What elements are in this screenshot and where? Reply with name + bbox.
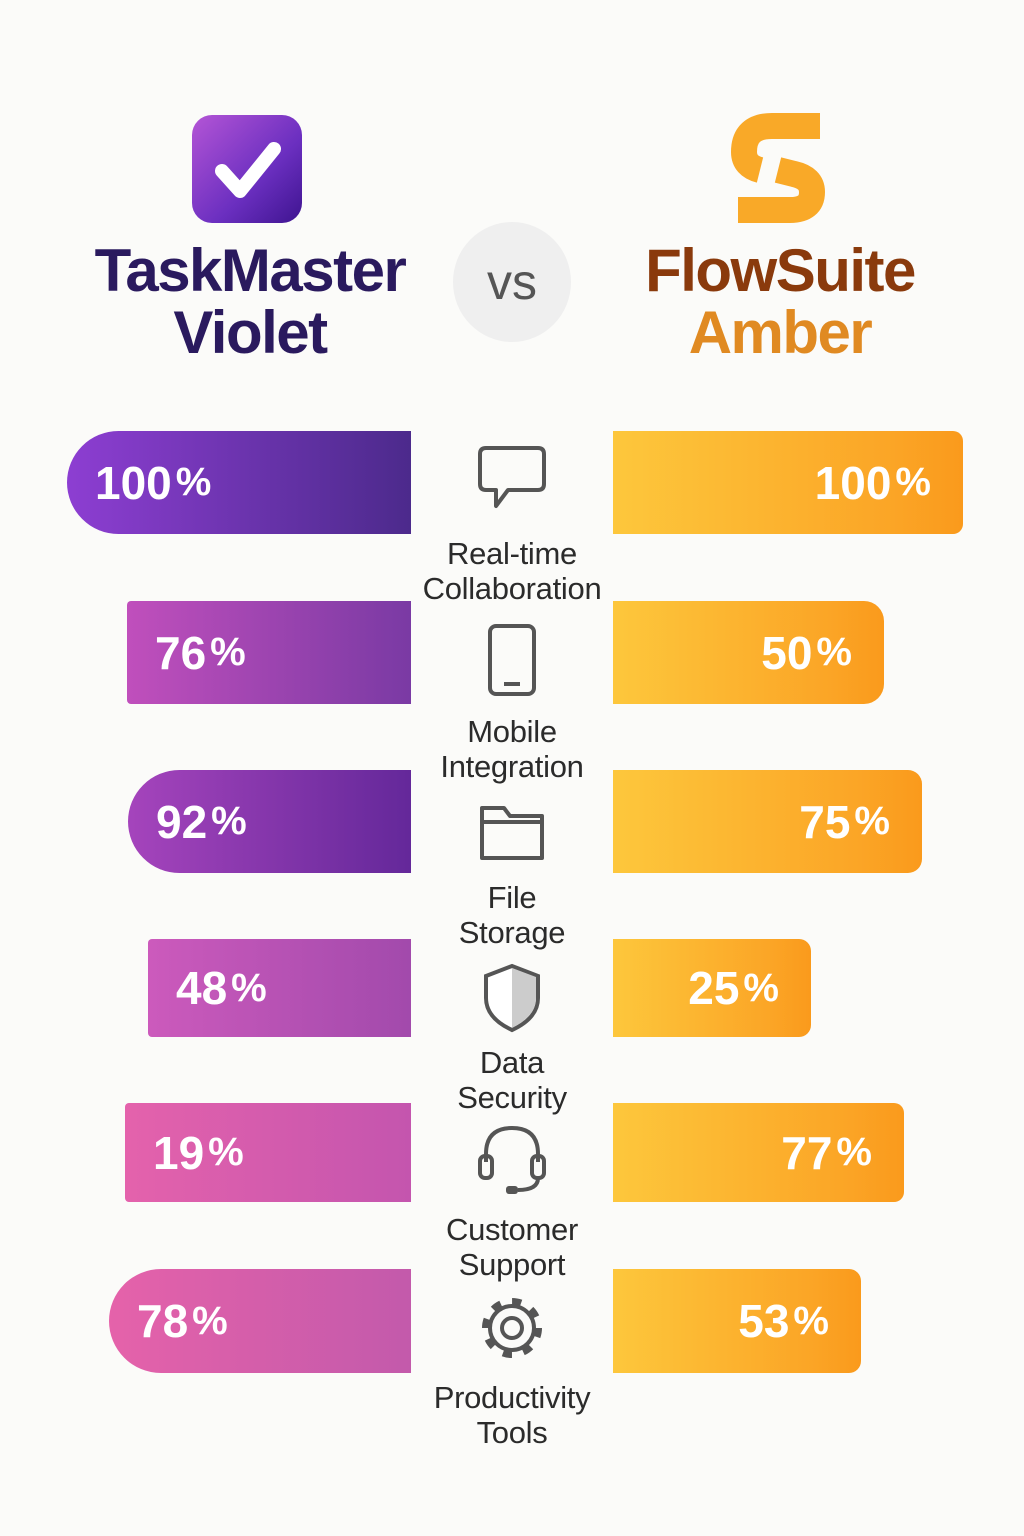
- label: Mobile Integration: Integration: [440, 749, 584, 784]
- bar: FlowSuite File 75%: %: [854, 799, 890, 843]
- logo: FlowSuite: [731, 113, 825, 223]
- label: Productivity Tools: [434, 1380, 590, 1450]
- bar: FlowSuite Security 25%: %: [743, 966, 779, 1010]
- vs badge: vs: [487, 254, 537, 310]
- label: File Storage: File: [488, 880, 536, 915]
- bar: TaskMaster File 92%: %: [211, 799, 247, 843]
- label: Customer Support: Support: [459, 1247, 565, 1282]
- bar: FlowSuite Real-time 100%: 100: [815, 456, 891, 508]
- bar: FlowSuite Real-time 100%: [613, 431, 963, 534]
- bar: TaskMaster Support 19%: %: [208, 1130, 244, 1174]
- label: Data Security: [457, 1045, 567, 1115]
- title: FlowSuite Amber: Amber: [689, 299, 871, 366]
- label: File Storage: Storage: [459, 915, 565, 950]
- bar: TaskMaster Real-time 100%: 100: [95, 456, 172, 508]
- bar: FlowSuite Support 77%: %: [836, 1130, 872, 1174]
- bar: FlowSuite Mobile 50%: %: [816, 630, 852, 674]
- right bars: [484, 431, 963, 1373]
- title: TaskMaster Violet: Violet: [173, 299, 327, 366]
- bar: FlowSuite Real-time 100%: %: [895, 460, 931, 504]
- bar: FlowSuite Support 77%: [613, 1103, 904, 1202]
- bar: FlowSuite File 75%: 75: [799, 796, 850, 848]
- bar: FlowSuite Mobile 50%: [613, 601, 884, 704]
- icon: gear: [482, 1298, 542, 1358]
- label: Mobile Integration: [440, 714, 584, 784]
- icon: phone: [488, 624, 536, 696]
- bar: TaskMaster Security 48%: [148, 939, 411, 1037]
- label: Real-time Collaboration: Collaboration: [423, 571, 601, 606]
- bar: TaskMaster Real-time 100%: %: [176, 460, 211, 504]
- label: Real-time Collaboration: [423, 536, 601, 606]
- icon: folder: [480, 806, 544, 860]
- label: Data Security: Data: [480, 1045, 544, 1080]
- title: FlowSuite Amber: FlowSuite: [645, 237, 915, 304]
- bar: FlowSuite Productivity 53%: [613, 1269, 861, 1373]
- bar: TaskMaster Productivity 78%: 78: [137, 1295, 188, 1347]
- bar: TaskMaster Security 48%: 48: [176, 962, 227, 1014]
- vs badge: [453, 222, 571, 342]
- bar: TaskMaster Productivity 78%: %: [192, 1298, 228, 1342]
- label: File Storage: [459, 880, 565, 950]
- bar: FlowSuite Productivity 53%: %: [793, 1298, 829, 1342]
- bar: TaskMaster Productivity 78%: [109, 1269, 411, 1373]
- label: Customer Support: [446, 1212, 578, 1282]
- label: Real-time Collaboration: Real-time: [447, 536, 577, 571]
- bar: TaskMaster Real-time 100%: [67, 431, 411, 534]
- title: FlowSuite Amber: [645, 237, 915, 366]
- bar: FlowSuite Productivity 53%: 53: [738, 1295, 789, 1347]
- label: Productivity Tools: Productivity: [434, 1380, 590, 1415]
- label: Productivity Tools: Tools: [477, 1415, 547, 1450]
- label: Customer Support: Customer: [446, 1212, 578, 1247]
- label: Mobile Integration: Mobile: [467, 714, 557, 749]
- bar: FlowSuite Mobile 50%: 50: [761, 626, 812, 678]
- bar: FlowSuite Support 77%: 77: [781, 1126, 832, 1178]
- bar: TaskMaster Support 19%: [125, 1103, 411, 1202]
- icon: headset: [478, 1126, 546, 1194]
- bar: TaskMaster Mobile 76%: 76: [155, 626, 206, 678]
- bar: TaskMaster File 92%: [128, 770, 411, 873]
- bar: FlowSuite Security 25%: [613, 939, 811, 1037]
- label: Data Security: Security: [457, 1080, 567, 1115]
- title: TaskMaster Violet: [95, 237, 406, 366]
- bar: TaskMaster File 92%: 92: [156, 796, 207, 848]
- icon: shield: [484, 964, 540, 1032]
- bar: FlowSuite File 75%: [613, 770, 922, 873]
- title: TaskMaster Violet: TaskMaster: [95, 237, 405, 304]
- bar: TaskMaster Mobile 76%: %: [210, 630, 246, 674]
- logo: TaskMaster: [192, 115, 302, 223]
- bar: TaskMaster Support 19%: 19: [153, 1126, 204, 1178]
- bar: TaskMaster Security 48%: %: [231, 966, 267, 1010]
- icon: chat bubble: [478, 446, 546, 508]
- bar: FlowSuite Security 25%: 25: [688, 962, 739, 1014]
- left bars: [67, 431, 539, 1373]
- bar: TaskMaster Mobile 76%: [127, 601, 411, 704]
